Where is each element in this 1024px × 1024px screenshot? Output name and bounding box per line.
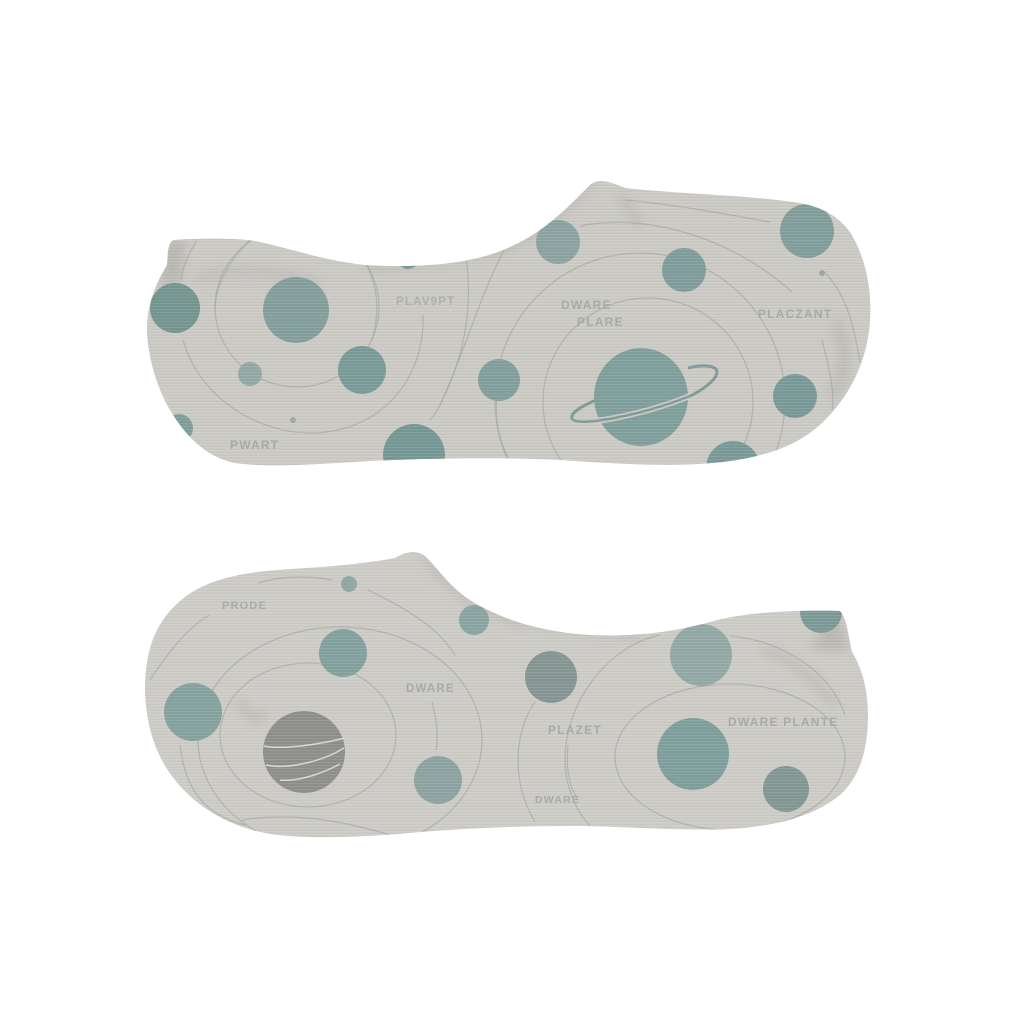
- planet: left edge: [164, 683, 222, 741]
- label: DWARE upper: DWARE: [406, 683, 455, 695]
- panel: bottom sock: [140, 545, 880, 853]
- planet: bottom right cropped: [706, 441, 757, 464]
- knit texture: bottom sock: [150, 576, 846, 834]
- striped grey planet: [263, 711, 345, 793]
- planet: large pale: [670, 624, 732, 686]
- planet: ankle: [536, 220, 580, 264]
- planet: right of large: [338, 346, 386, 394]
- label: DWARE lower: DWARE: [535, 794, 580, 806]
- label: PLAVØPT: PLAV9PT: [396, 296, 455, 308]
- knit texture: top sock: [150, 201, 860, 463]
- planet: left edge: [150, 283, 200, 333]
- planet: lower right: [763, 766, 809, 812]
- planet: small: [238, 362, 262, 386]
- planet: small top: [341, 576, 357, 592]
- planet: bottom left: [173, 414, 193, 437]
- planet: bottom cropped: [383, 424, 445, 460]
- planet: lower middle: [414, 756, 462, 804]
- fabric folds: bottom sock: [240, 556, 850, 719]
- planet: upper mid: [662, 248, 706, 292]
- planet: top cropped: [400, 266, 416, 269]
- planet: toe upper: [780, 204, 834, 258]
- planet: large left: [263, 277, 329, 343]
- planet: upper left: [319, 629, 367, 677]
- label: PLAZET: PLAZET: [548, 723, 602, 737]
- label: PWART: PWART: [230, 438, 279, 452]
- planet: large centre: [657, 718, 729, 790]
- tiny dots: top sock: [290, 270, 825, 423]
- fabric folds: top sock: [160, 180, 844, 395]
- label: DWARE PLARE: DWARE: [561, 298, 612, 312]
- label: PRODE: PRODE: [222, 600, 267, 612]
- label: PLACZANT: PLACZANT: [758, 307, 832, 321]
- panel: top sock: [147, 181, 870, 466]
- label: DWARE PLARE: PLARE: [577, 315, 624, 329]
- planet: heel cropped: [800, 610, 842, 633]
- planet: toe lower: [773, 374, 817, 418]
- orbit lines: top sock: [180, 200, 860, 460]
- planet: middle: [478, 359, 520, 401]
- orbit lines: bottom sock: [150, 577, 845, 853]
- planet: grey middle: [525, 651, 577, 703]
- label: DWARE PLANTE: DWARE PLANTE: [728, 715, 838, 729]
- ringed planet: [572, 348, 717, 446]
- planet: ankle: [459, 605, 489, 635]
